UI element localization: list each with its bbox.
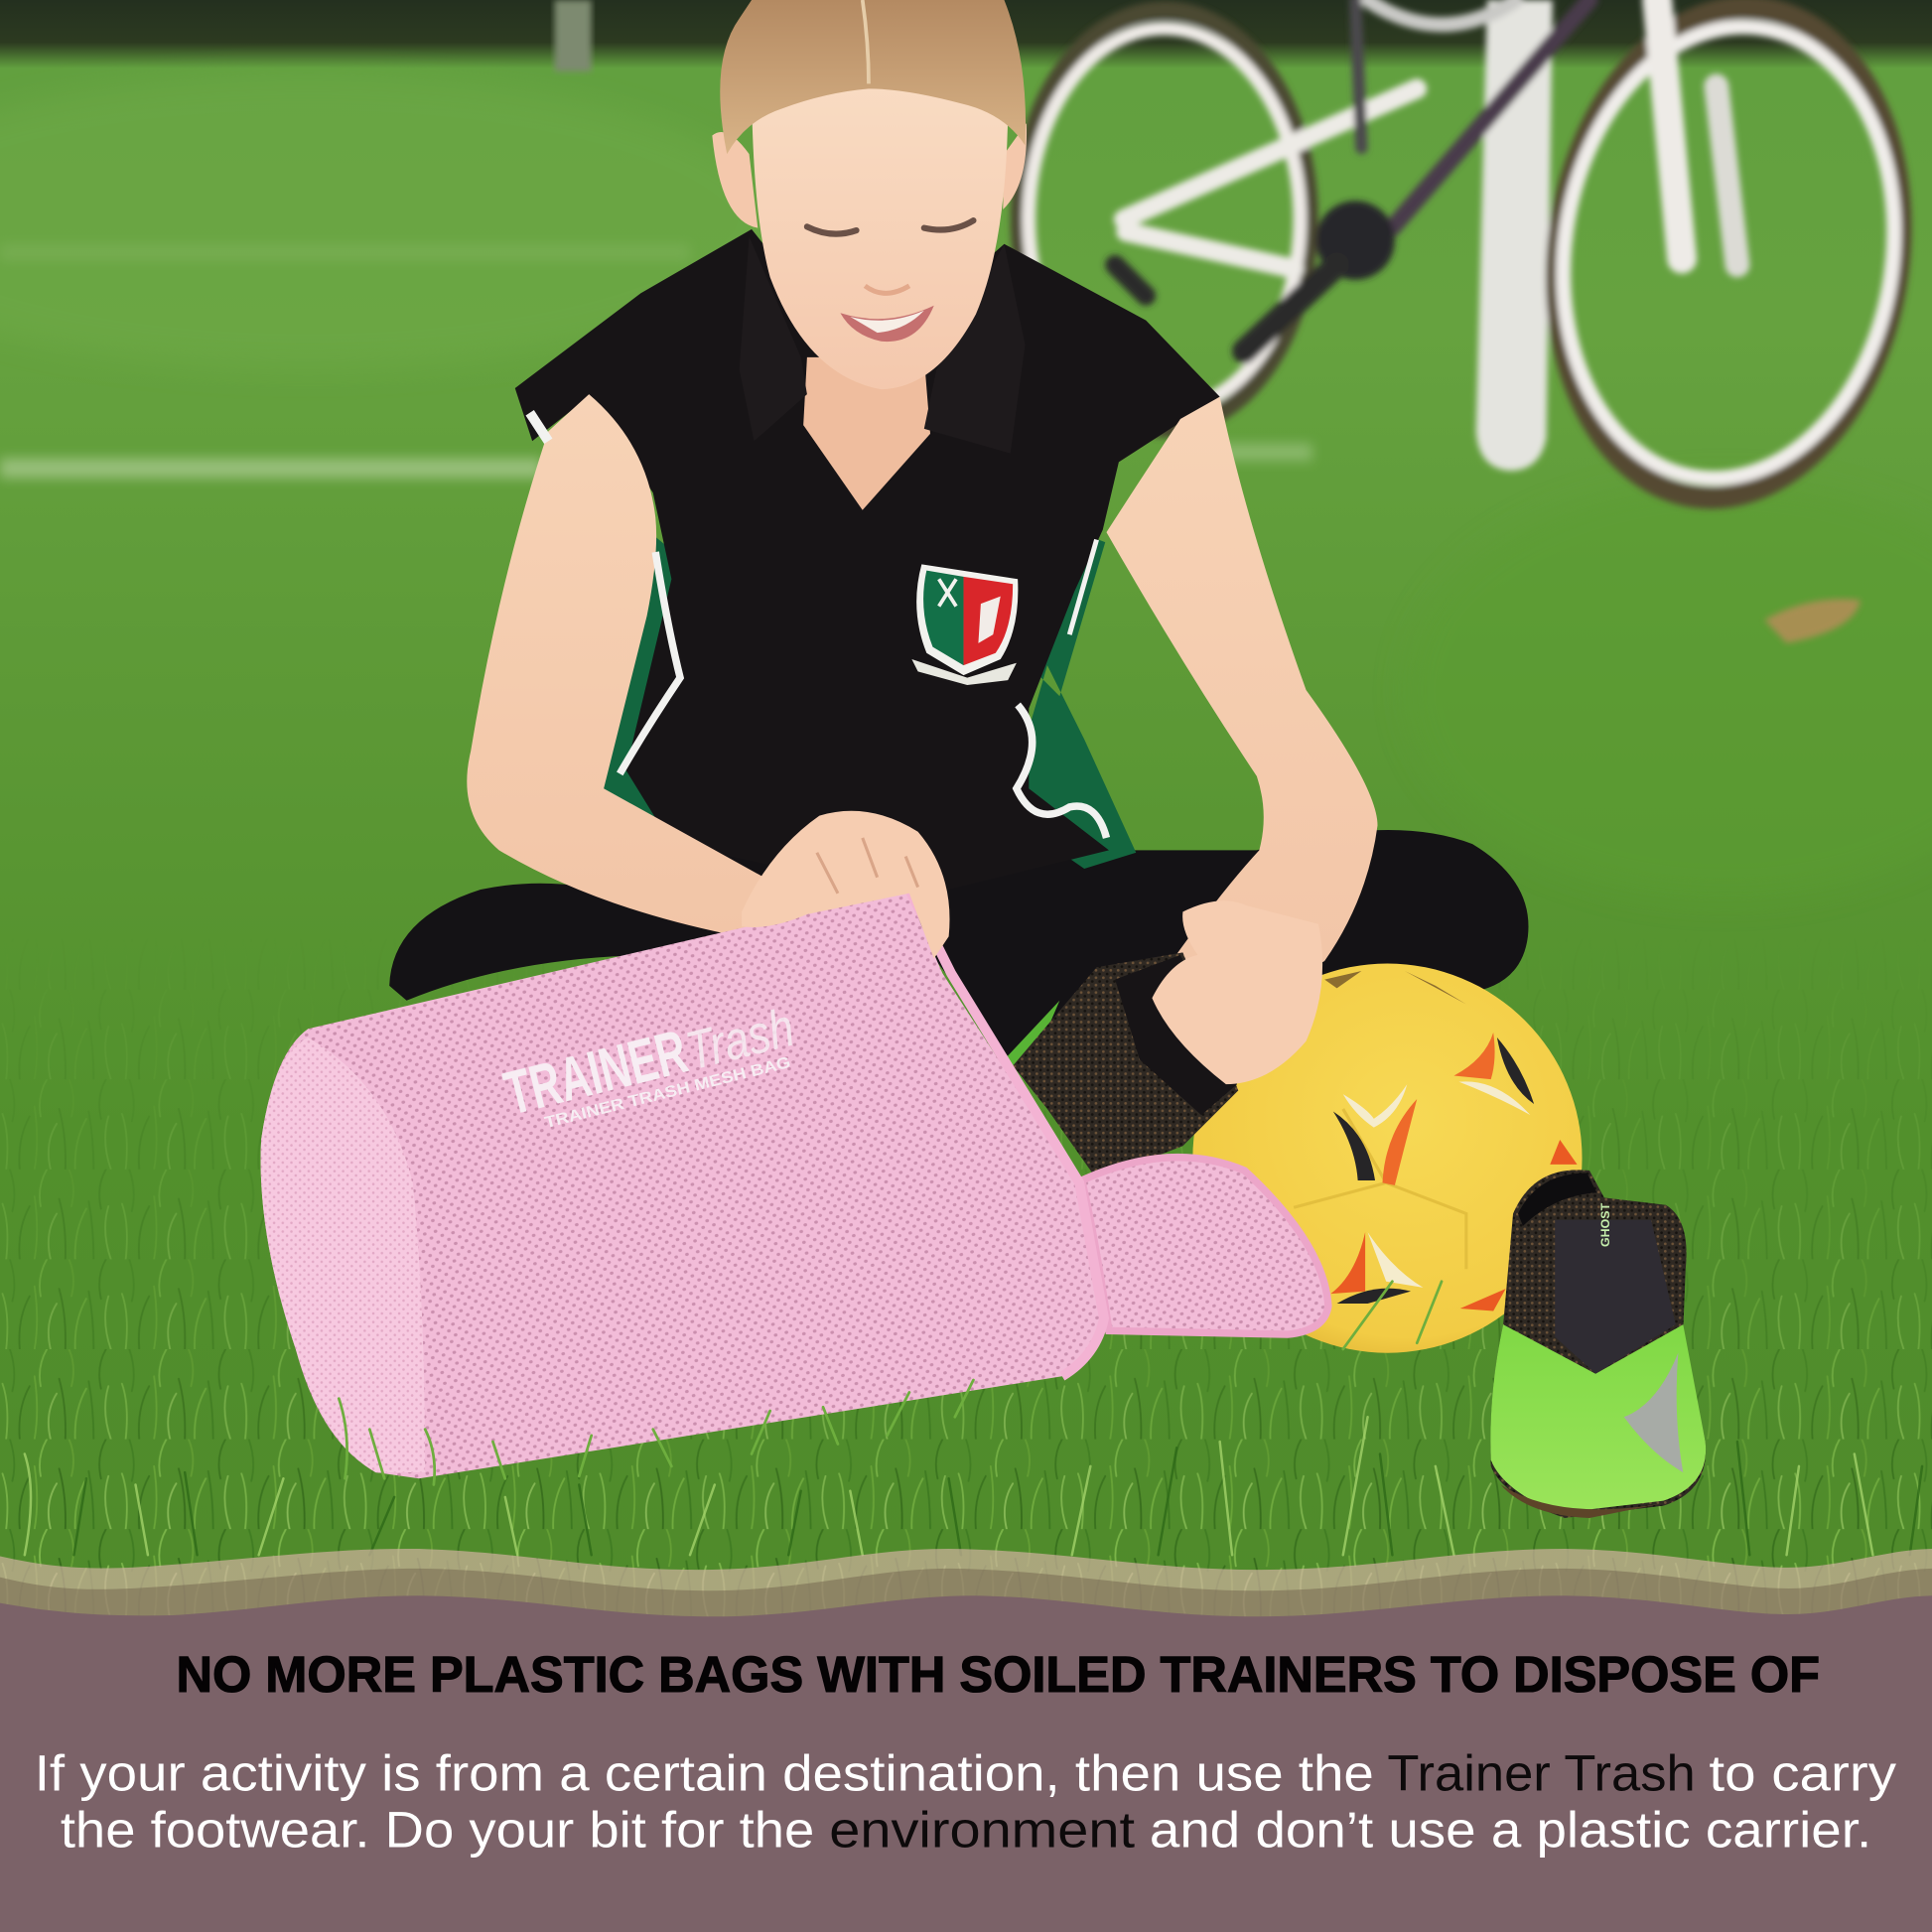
face [752, 73, 1008, 389]
wave band: light outer layer [0, 1549, 1932, 1932]
body line 2: environment [829, 1801, 1135, 1858]
hair [720, 0, 1026, 154]
collar flaps [740, 236, 1026, 454]
footer panel [0, 1595, 1932, 1932]
bike right wheel [1526, 0, 1931, 520]
pink mesh bag [261, 811, 1442, 1484]
foreground grass [25, 1417, 1922, 1555]
left arm [467, 394, 788, 934]
leggings [389, 830, 1528, 1059]
bag logo: TRAINER TRASH MESH BAG [543, 1053, 792, 1132]
body line 1: Trainer Trash [1387, 1744, 1696, 1801]
bag main body [261, 890, 1106, 1478]
body line 1: to carry [1709, 1744, 1897, 1801]
shirt [515, 229, 1220, 890]
eyes [807, 220, 973, 234]
bike frame [1115, 0, 1737, 351]
bag logo: Trash [680, 997, 800, 1081]
boot label: GHOST [1598, 1202, 1612, 1247]
body line 2: and don’t use a plastic carrier. [1150, 1801, 1871, 1858]
bag end panel [261, 1037, 425, 1472]
heading: NO MORE PLASTIC BAGS WITH SOILED TRAINERS TO DISPOSE OF [176, 1646, 1820, 1703]
girl [389, 0, 1528, 1059]
body line 2: the footwear. Do your bit for the [61, 1801, 814, 1858]
left hand gripping bag [742, 811, 950, 959]
body text [35, 1744, 1897, 1858]
body line 1: If your activity is from a certain destination, then use the [35, 1744, 1374, 1801]
bag logo: TRAINER [498, 1018, 694, 1129]
yellow football [1192, 964, 1583, 1353]
shirt white piping [530, 413, 1106, 838]
school crest [911, 564, 1018, 685]
wave band: mid layer [0, 1569, 1932, 1932]
left football boot [1004, 952, 1238, 1179]
right arm [1106, 397, 1378, 998]
zip edge [909, 890, 1104, 1376]
shirt green side panels [598, 530, 1136, 869]
ears [712, 123, 1027, 228]
bag open flap [1082, 1158, 1328, 1334]
bike left wheel [1019, 10, 1310, 429]
right football boot [1490, 1170, 1706, 1518]
body line 1 [35, 1744, 1897, 1801]
white post [1476, 0, 1553, 471]
right hand on boot [1152, 900, 1322, 1084]
boot green toe [1490, 1324, 1706, 1513]
nose and mouth [840, 286, 934, 342]
neck [803, 357, 930, 510]
grass over bag bottom [339, 1282, 1442, 1484]
bicycle in background [1019, 0, 1931, 520]
body line 2 [61, 1801, 1871, 1858]
